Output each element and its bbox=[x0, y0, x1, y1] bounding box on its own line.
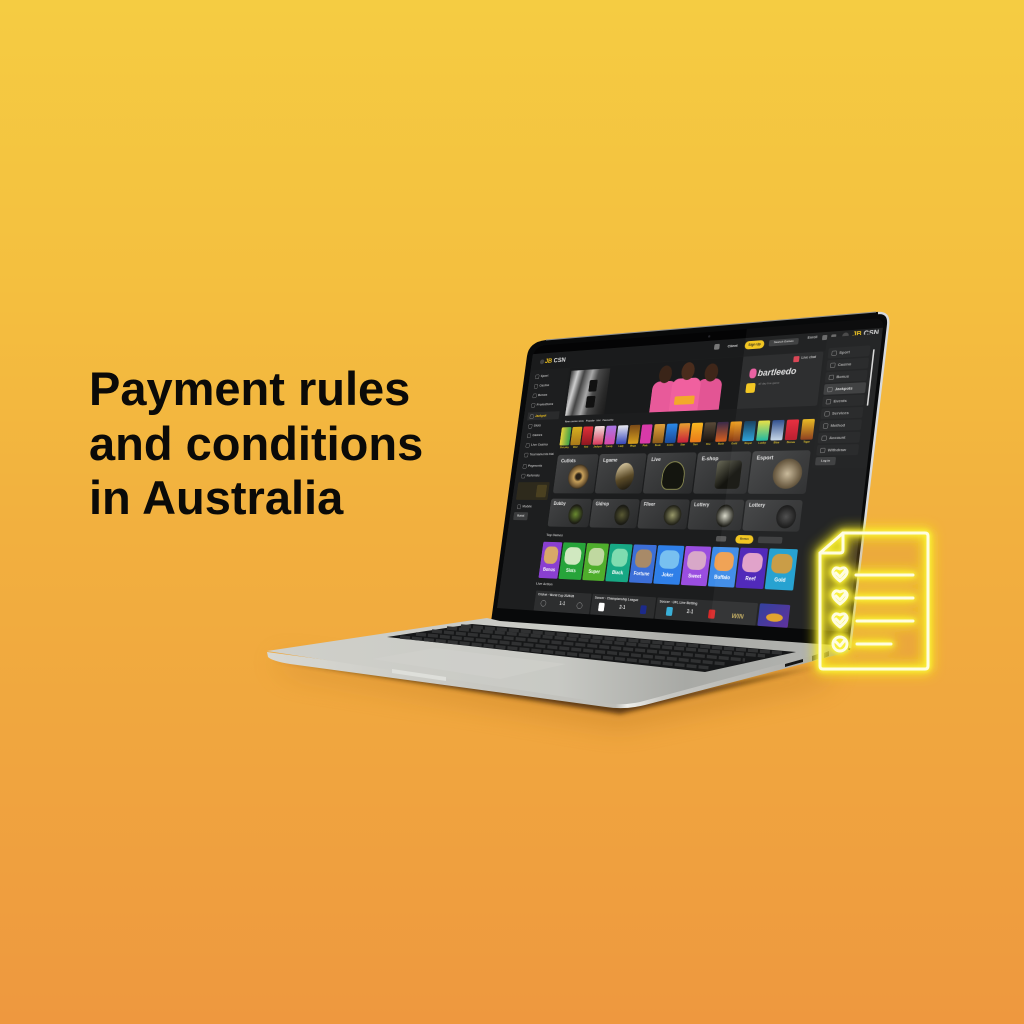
right sidebar: Withdraw bbox=[828, 447, 846, 452]
right sidebar: Method bbox=[830, 423, 845, 428]
section heading: live events: Live Action bbox=[536, 581, 553, 586]
game cards: Super bbox=[588, 569, 600, 575]
game cards: Slots bbox=[566, 568, 576, 574]
left sidebar: Payments bbox=[528, 464, 542, 468]
category cards row one: Live bbox=[651, 457, 661, 463]
left sidebar: Referrals bbox=[526, 473, 540, 477]
laptop lid bbox=[491, 312, 889, 650]
category cards row one: Cutlots bbox=[561, 458, 576, 464]
category cards row two: Fliver bbox=[643, 502, 655, 507]
right sidebar: Sport bbox=[839, 350, 850, 355]
match panels: 1-1 bbox=[559, 601, 565, 607]
thumbnails: Royal bbox=[744, 442, 752, 445]
top navigation bbox=[531, 328, 883, 370]
trackpad bbox=[372, 648, 566, 679]
thumbnails: Pink bbox=[642, 444, 648, 447]
game cards: Fortune bbox=[633, 571, 650, 577]
thumbnails: Gold bbox=[731, 442, 737, 445]
category cards row one: Lgame bbox=[603, 457, 618, 463]
thumbnails: Fire bbox=[706, 443, 711, 446]
left sidebar: Slots bbox=[533, 423, 541, 427]
outer neon glow bbox=[820, 533, 928, 669]
game cards: Buffalo bbox=[714, 575, 730, 581]
right sidebar: Events bbox=[833, 398, 847, 404]
laptop screen: casino site bbox=[497, 318, 884, 632]
game cards: Joker bbox=[661, 572, 674, 578]
game cards: Black bbox=[612, 570, 623, 576]
filter pills bbox=[716, 535, 782, 544]
thumbnails: Star bbox=[680, 444, 685, 446]
sculpture logo bbox=[565, 368, 610, 416]
top navigation: Client bbox=[727, 343, 738, 348]
players bbox=[649, 362, 722, 412]
thumbnails: Lucky bbox=[758, 442, 766, 445]
right sidebar: Casino bbox=[838, 362, 852, 367]
thumbnails: Candy bbox=[606, 445, 613, 448]
left sidebar: Casino bbox=[539, 383, 550, 387]
sponsor panel: all day live game bbox=[758, 382, 780, 386]
left sidebar: Guest bbox=[517, 514, 525, 518]
left sidebar: Bonus bbox=[538, 393, 548, 397]
match panels: WIN bbox=[731, 612, 744, 620]
category cards row two bbox=[548, 498, 802, 532]
top navigation: Sign Up bbox=[748, 343, 761, 347]
category cards row one: Esport bbox=[756, 455, 774, 461]
match panels: Soccer · UFL Live Betting bbox=[659, 600, 698, 606]
match panels: 2-1 bbox=[619, 605, 626, 610]
category cards row two: Lottery bbox=[694, 502, 710, 508]
thumbnails: Blue bbox=[773, 441, 779, 444]
right sidebar: Account bbox=[829, 435, 846, 440]
document tint bbox=[820, 533, 928, 669]
title: and conditions bbox=[89, 416, 423, 470]
game cards: Bonus bbox=[543, 567, 555, 573]
game cards: Reef bbox=[745, 576, 756, 582]
inner neon glow bbox=[820, 533, 928, 669]
thumbnails: Rush bbox=[718, 443, 724, 446]
title bbox=[89, 362, 423, 524]
thumbnails: Jackpot bbox=[593, 445, 602, 448]
left sidebar: Games bbox=[532, 433, 543, 437]
keyboard bbox=[387, 624, 796, 672]
thumbnails: Wild bbox=[573, 446, 578, 449]
title: Payment rules bbox=[89, 362, 410, 415]
thumbnails: Slot play bbox=[560, 446, 569, 449]
match panels: Soccer · Championship League bbox=[595, 596, 639, 602]
game cards: Sweet bbox=[688, 574, 702, 579]
laptop base bbox=[267, 618, 848, 708]
left sidebar: Mobile bbox=[522, 504, 532, 508]
right sidebar: Bonus bbox=[836, 374, 849, 379]
category cards row two: Lottery bbox=[749, 503, 765, 508]
thumbnails: Sun bbox=[693, 443, 698, 446]
left sidebar: Jackpot bbox=[535, 413, 547, 418]
filter pills: Bonus bbox=[740, 538, 749, 541]
top bezel with camera bbox=[533, 318, 884, 354]
reflection on screen bbox=[710, 318, 884, 632]
thumbnails: Book bbox=[655, 444, 661, 447]
category cards row two: Dubby bbox=[553, 501, 566, 506]
sponsor panel: Live chat bbox=[801, 355, 816, 360]
match panels: 2-1 bbox=[686, 609, 694, 615]
category cards row one bbox=[553, 450, 810, 494]
thumbnails: Mega bbox=[630, 445, 636, 448]
top navigation: JB CSN bbox=[544, 356, 566, 365]
thumbnails: Coins bbox=[667, 444, 674, 447]
top navigation: JB CSN bbox=[852, 328, 879, 338]
left sidebar: Promotions bbox=[536, 402, 554, 407]
thumbnails: Tiger bbox=[803, 441, 810, 444]
right sidebar: Log in bbox=[821, 460, 830, 463]
right sidebar bbox=[812, 333, 882, 468]
front notch bbox=[392, 669, 446, 681]
game cards bbox=[538, 542, 798, 590]
category cards row two: Gidrop bbox=[595, 502, 609, 507]
left sidebar bbox=[497, 368, 569, 611]
sponsor panel: bartleedo bbox=[757, 366, 797, 378]
category cards row one: E-shop bbox=[701, 456, 719, 462]
thumbnails bbox=[560, 418, 815, 449]
match panels bbox=[534, 590, 790, 628]
sponsor panel bbox=[737, 351, 824, 409]
right sidebar: Services bbox=[832, 411, 849, 416]
match panels: Cricket · World Cup 2025/26 bbox=[538, 593, 574, 598]
section heading: top games: Top Games bbox=[546, 533, 563, 537]
title: in Australia bbox=[89, 471, 343, 524]
game cards: Gold bbox=[774, 577, 786, 583]
left sidebar: Sport bbox=[540, 374, 549, 378]
neon tube bbox=[820, 533, 928, 669]
top navigation: Enroll bbox=[807, 336, 817, 340]
hero banner bbox=[564, 357, 743, 416]
laptop shadow bbox=[270, 659, 840, 726]
top navigation: Search Games bbox=[774, 340, 794, 344]
thumbnails: Red bbox=[584, 446, 588, 449]
side ports bbox=[785, 651, 829, 667]
thumbnails: Bonus bbox=[787, 441, 795, 444]
thumbnail strip: New casino slots Popular Hot Favourite bbox=[565, 419, 614, 423]
right sidebar: Jackpots bbox=[835, 386, 853, 391]
thumbnails: Lady bbox=[618, 445, 624, 448]
left sidebar: Live Casino bbox=[531, 442, 548, 447]
